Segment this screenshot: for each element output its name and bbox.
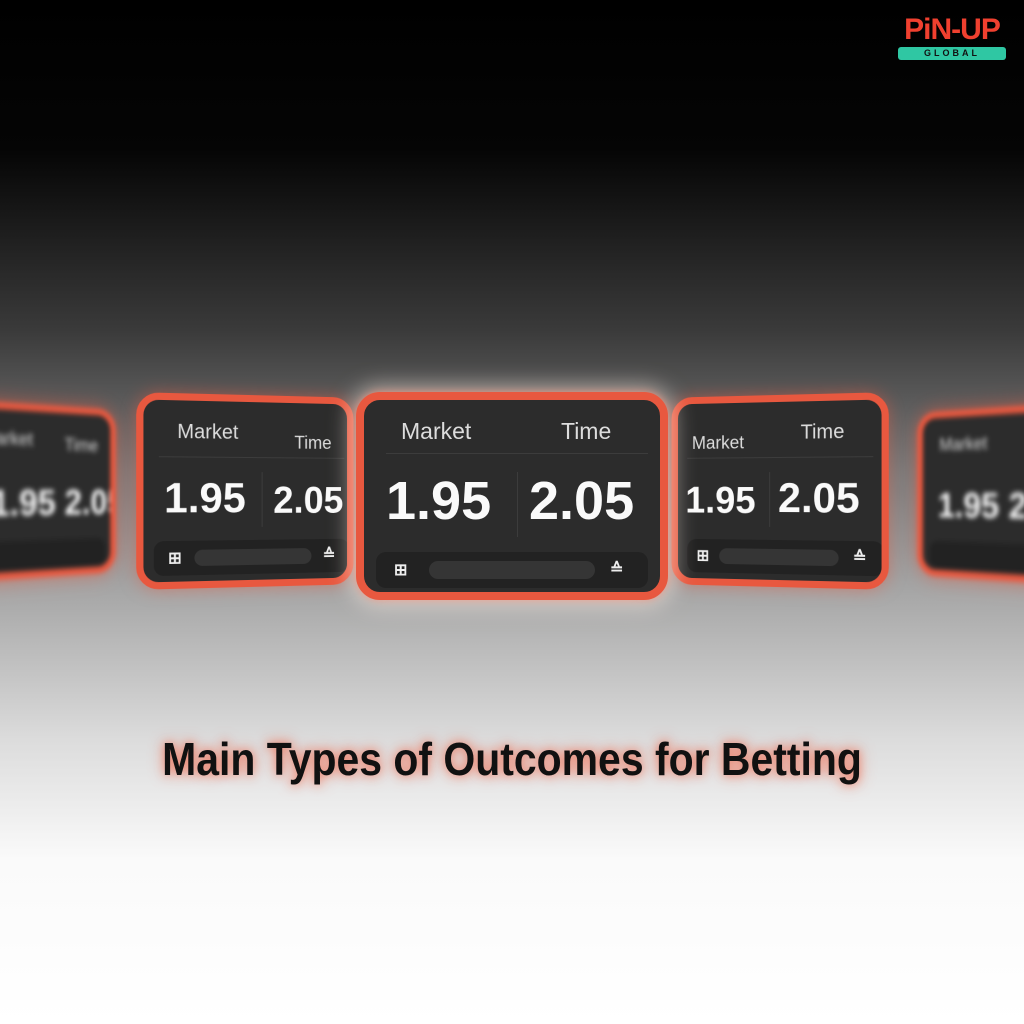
left card: Market [177, 421, 238, 444]
right card: 1.95 [685, 480, 756, 522]
center card: ⊞ [394, 562, 407, 579]
center card: Time [561, 418, 611, 444]
center card: ≙ [610, 561, 623, 578]
far right card (blurred): Market [939, 433, 987, 455]
center card [356, 392, 668, 600]
left card: ⊞ [168, 550, 182, 568]
right card: ≙ [853, 549, 867, 567]
right card [671, 392, 889, 590]
right card: 2.05 [778, 474, 860, 522]
title: Main Types of Outcomes for Betting [162, 733, 862, 785]
left card: Time [294, 433, 332, 453]
left card [136, 392, 354, 590]
center card: 1.95 [386, 471, 491, 531]
far right card (blurred) [917, 403, 1024, 585]
center card: Market [401, 418, 471, 444]
logo: GLOBAL [924, 48, 980, 58]
logo: PiN-UP [904, 13, 1000, 46]
left card: 1.95 [164, 474, 246, 522]
right card: ⊞ [697, 548, 709, 565]
center card: 2.05 [529, 471, 634, 531]
right card: Market [692, 433, 744, 453]
far left card (blurred): Time [65, 435, 98, 456]
left card: 2.05 [273, 480, 343, 522]
right card: Time [801, 421, 844, 444]
logo [898, 13, 1006, 60]
left card: ≙ [323, 547, 335, 564]
far left card (blurred) [0, 400, 116, 582]
